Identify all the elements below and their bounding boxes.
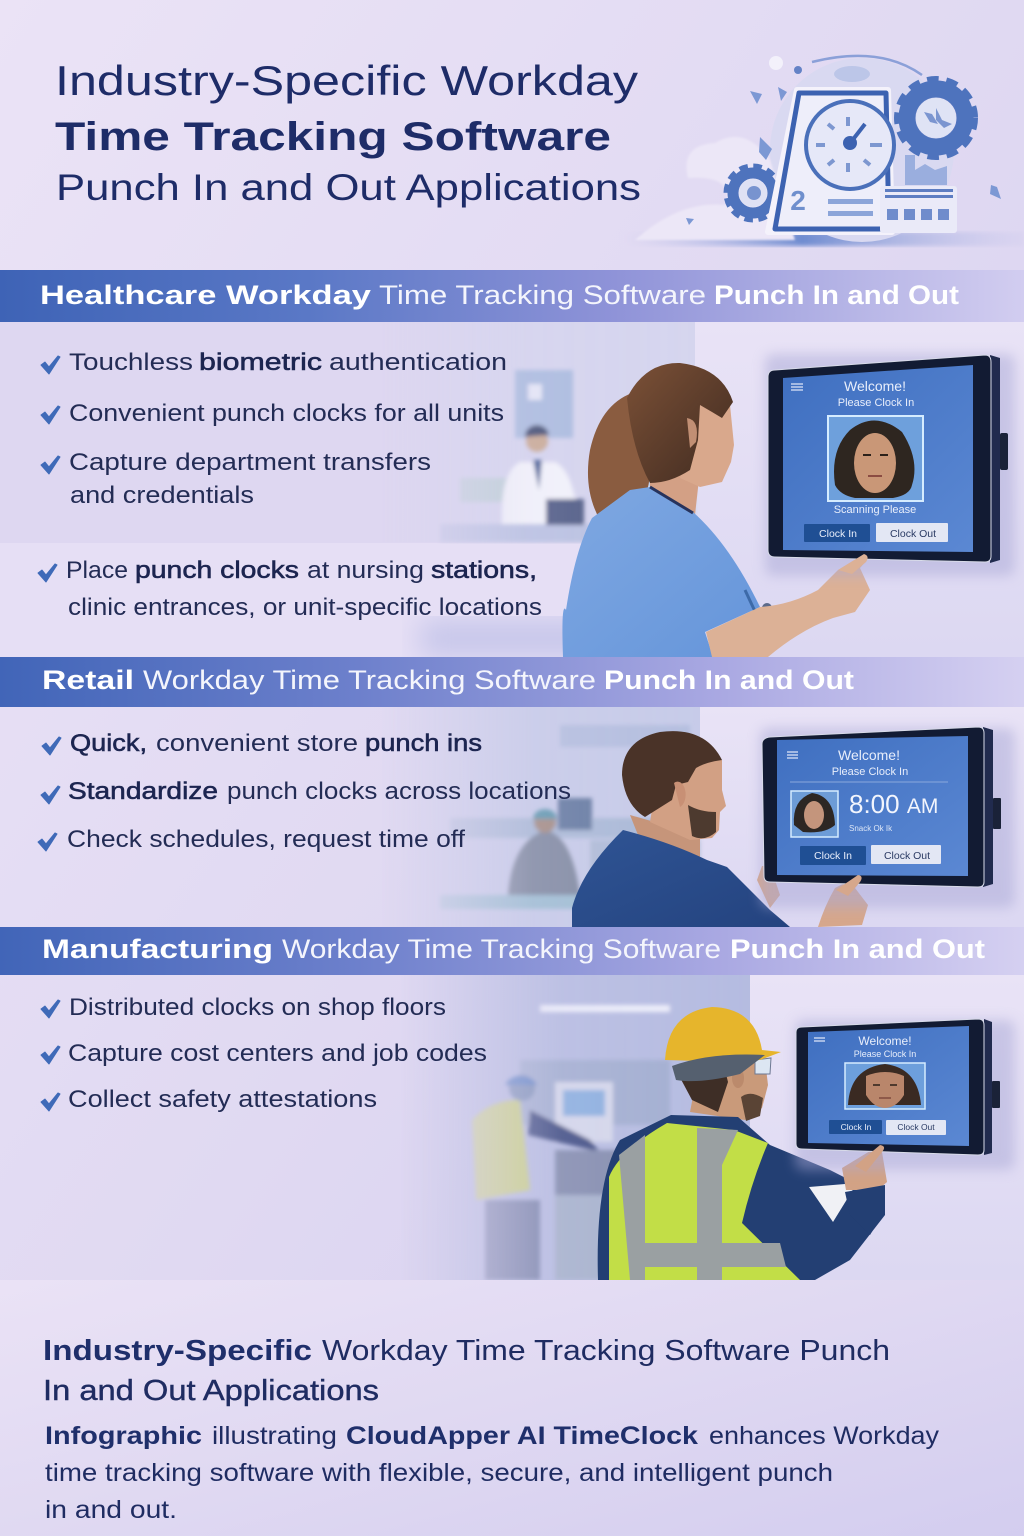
healthcare checklist: punch clocks xyxy=(135,557,299,584)
banner: manufacturing: Workday Time Tracking Software xyxy=(282,934,721,964)
manufacturing checklist: Capture cost centers and job codes xyxy=(68,1040,487,1067)
safety vest xyxy=(609,1123,800,1280)
neck and head xyxy=(630,815,700,858)
worker xyxy=(598,1007,887,1280)
panel: retail section xyxy=(38,707,1024,927)
healthcare checklist: clinic entrances, or unit-specific locations xyxy=(68,594,542,621)
jacket xyxy=(598,1115,885,1280)
tablet: face scan: Clock Out xyxy=(890,528,936,540)
face photo xyxy=(845,1063,925,1109)
icon: clipboard xyxy=(768,90,892,232)
manufacturing checklist xyxy=(41,994,487,1113)
man xyxy=(572,731,868,927)
icon: large gear xyxy=(899,81,973,155)
footer description: in and out. xyxy=(45,1496,177,1524)
banner: healthcare xyxy=(0,270,1024,322)
manufacturing checklist: Distributed clocks on shop floors xyxy=(69,994,446,1021)
footer heading: In and Out Applications xyxy=(43,1375,379,1407)
ponytail xyxy=(588,393,655,545)
footer heading: Workday Time Tracking Software Punch xyxy=(322,1335,890,1367)
tablet: face scan xyxy=(765,354,1015,576)
retail checklist: Standardize xyxy=(68,778,218,805)
footer description: Infographic xyxy=(45,1422,202,1450)
manufacturing checklist: Collect safety attestations xyxy=(68,1086,377,1113)
footer description xyxy=(45,1422,940,1524)
healthcare checklist: Place xyxy=(66,557,128,584)
tablet: face scan: Clock In xyxy=(841,1122,872,1132)
beard xyxy=(688,805,716,838)
banner: manufacturing: Manufacturing xyxy=(42,934,273,964)
tablet: time display: Please Clock In xyxy=(832,766,908,778)
footer heading xyxy=(43,1335,890,1407)
hair xyxy=(622,731,722,817)
face photo xyxy=(828,416,923,501)
nurse xyxy=(562,363,870,657)
title: Industry-Specific Workday xyxy=(55,57,638,104)
banner: retail: Punch In and Out xyxy=(604,665,854,695)
neck xyxy=(650,470,700,515)
scrubs xyxy=(562,487,760,657)
healthcare checklist: authentication xyxy=(329,349,507,376)
hand xyxy=(842,1145,887,1190)
head xyxy=(690,1060,768,1120)
healthcare checklist: biometric xyxy=(199,349,322,376)
banner: healthcare: Punch In and Out xyxy=(714,280,959,310)
icon: clipboard: 2 xyxy=(790,185,806,216)
footer heading: Industry-Specific xyxy=(43,1335,312,1367)
panel: healthcare section xyxy=(0,322,1024,657)
tablet: time display: Welcome! xyxy=(838,747,900,763)
clipboard xyxy=(809,1183,857,1222)
footer description: enhances Workday xyxy=(709,1422,940,1450)
retail checklist: punch clocks across locations xyxy=(227,778,571,805)
footer description: illustrating xyxy=(212,1422,337,1450)
panel: manufacturing section xyxy=(41,975,1024,1280)
fingertip over tablet xyxy=(855,1145,884,1172)
icon: small gear xyxy=(728,168,778,218)
tablet: face scan: Welcome! xyxy=(858,1034,912,1048)
healthcare checklist: Convenient punch clocks for all units xyxy=(69,400,504,427)
title: Punch In and Out Applications xyxy=(56,167,641,208)
tablet: time display: 8:00 AM xyxy=(849,789,938,819)
healthcare checklist: and credentials xyxy=(70,482,254,509)
factory floor background scene xyxy=(435,707,702,927)
healthcare checklist: at nursing xyxy=(307,557,424,584)
icon: clock, clipboard and gears illustration xyxy=(620,56,1024,246)
footer description: time tracking software with flexible, secure, and intelligent punch xyxy=(45,1459,833,1487)
hospital background scene xyxy=(440,322,696,544)
face xyxy=(680,395,734,487)
shop floor background scene xyxy=(436,975,750,1280)
healthcare checklist: Capture department transfers xyxy=(69,449,431,476)
footer description: CloudApper AI TimeClock xyxy=(346,1422,698,1450)
tablet: face scan: Please Clock In xyxy=(854,1049,916,1059)
arm and hand xyxy=(706,553,870,657)
retail checklist: convenient store xyxy=(156,730,358,757)
tablet: face scan xyxy=(795,1019,1015,1170)
banner: retail: Workday Time Tracking Software xyxy=(143,665,596,695)
banner: manufacturing: Punch In and Out xyxy=(730,934,985,964)
healthcare checklist xyxy=(38,349,542,621)
tablet: time display: Clock Out xyxy=(884,850,930,862)
fingertip over tablet xyxy=(836,875,862,896)
retail checklist: Quick, xyxy=(70,730,147,757)
hard hat xyxy=(665,1007,781,1061)
healthcare checklist: Touchless xyxy=(69,349,193,376)
icon: factory card xyxy=(880,155,957,233)
tablet: time display: Snack Ok Ik xyxy=(849,824,893,833)
fingertip over tablet xyxy=(838,554,868,574)
face photo xyxy=(791,791,838,837)
retail checklist: Check schedules, request time off xyxy=(67,826,465,853)
icon: clock face xyxy=(806,101,894,189)
healthcare checklist: stations, xyxy=(431,557,537,584)
retail checklist xyxy=(38,730,571,853)
hair xyxy=(627,363,733,483)
tablet: face scan: Scanning Please xyxy=(834,504,916,516)
shirt xyxy=(572,830,790,927)
banner: healthcare: Healthcare Workday xyxy=(40,280,371,310)
hands xyxy=(757,866,780,908)
retail checklist: punch ins xyxy=(365,730,482,757)
tablet: face scan: Clock In xyxy=(819,528,857,540)
title: Time Tracking Software xyxy=(55,115,611,159)
banner: manufacturing xyxy=(0,927,1024,975)
footer summary xyxy=(0,1280,1024,1536)
tablet: face scan: Welcome! xyxy=(844,378,906,394)
tablet: face scan: Clock Out xyxy=(897,1122,935,1132)
tablet: face scan: Please Clock In xyxy=(838,397,914,409)
tablet: time display: Clock In xyxy=(814,850,852,862)
banner: retail xyxy=(0,657,1024,707)
title xyxy=(55,57,641,208)
banner: healthcare: Time Tracking Software xyxy=(379,280,706,310)
tablet: time display xyxy=(760,727,1015,908)
banner: retail: Retail xyxy=(42,665,134,695)
